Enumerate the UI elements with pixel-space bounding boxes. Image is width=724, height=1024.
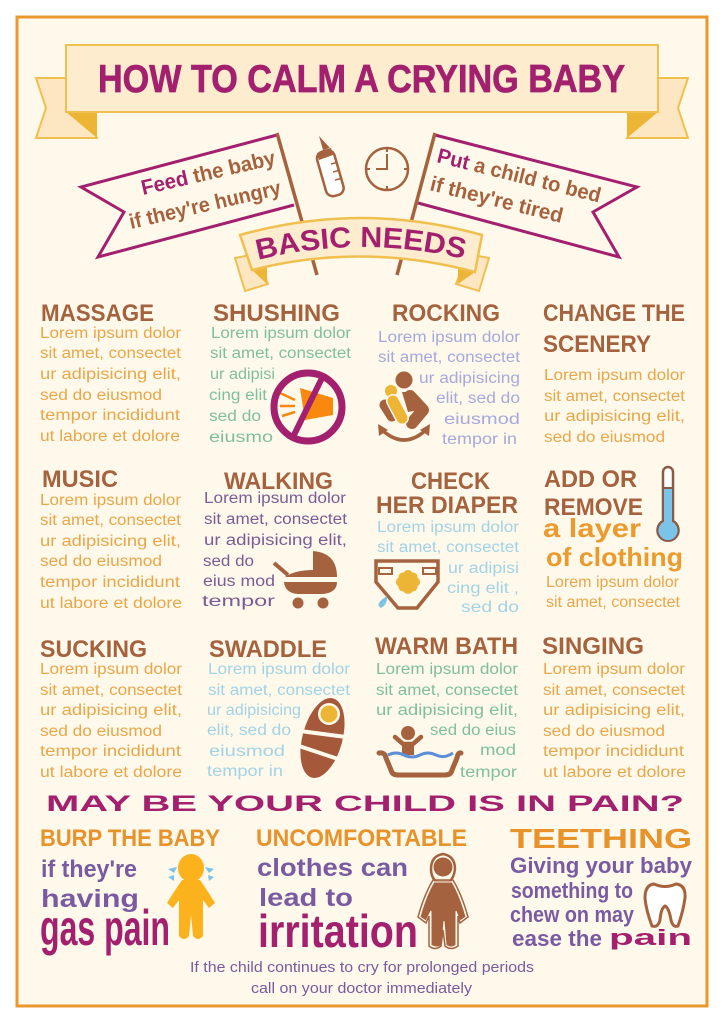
heading: SWADDLE xyxy=(209,636,327,663)
section heading: pain: MAY BE YOUR CHILD IS IN PAIN? xyxy=(46,791,684,816)
panel: rocking xyxy=(378,300,521,448)
heading: SCENERY xyxy=(543,331,651,358)
heading xyxy=(376,468,518,519)
title banner xyxy=(36,45,688,138)
text block: Lorem ipsum dolor xyxy=(204,490,346,507)
text block: sit amet, consectet xyxy=(378,349,521,366)
heading: MASSAGE xyxy=(41,300,154,327)
text block: Lorem ipsum dolor xyxy=(546,574,679,591)
text block: sit amet, consectet xyxy=(544,388,686,405)
text block: sit amet, consectet xyxy=(40,682,183,699)
text block: something to xyxy=(511,878,633,903)
icon: uncomfortable child xyxy=(418,854,468,948)
text block: lead to xyxy=(259,884,353,912)
text block xyxy=(40,325,182,445)
flag: put a child to bed xyxy=(397,133,637,275)
ribbon label: BASIC NEEDS xyxy=(256,227,466,260)
text block: cing elit , xyxy=(447,580,519,597)
icon: baby in bath xyxy=(379,726,461,775)
text block: sed do xyxy=(209,408,261,425)
text block: ur adipisicing xyxy=(207,702,301,719)
text block: tempor incididunt xyxy=(40,574,181,591)
text block: sed do xyxy=(461,599,519,616)
panel: swaddle xyxy=(207,636,352,783)
text block: Lorem ipsum dolor xyxy=(376,661,518,678)
heading: CHECK xyxy=(411,468,491,495)
text block xyxy=(257,854,418,957)
heading xyxy=(544,466,643,521)
icon: swaddled baby xyxy=(293,693,352,783)
heading: ROCKING xyxy=(392,300,500,327)
heading: MUSIC xyxy=(42,466,118,493)
panel: add or remove a layer of clothing xyxy=(543,466,683,611)
text block xyxy=(376,661,519,781)
text block xyxy=(40,661,183,781)
panel: music xyxy=(40,466,182,612)
text block: sed do eiusmod xyxy=(544,429,665,446)
text block: Lorem ipsum dolor xyxy=(544,367,685,384)
text block: Lorem ipsum dolor xyxy=(378,329,520,346)
text block: tempor in xyxy=(207,763,283,780)
text block: ur adipisicing elit, xyxy=(40,533,181,550)
flag: feed the baby: if they're hungry xyxy=(127,177,283,234)
text block: sit amet, consectet xyxy=(546,594,681,611)
panel: warm bath xyxy=(375,633,519,781)
panel: uncomfortable clothes xyxy=(256,825,468,957)
heading: SHUSHING xyxy=(213,300,340,327)
icon: clock xyxy=(366,148,408,190)
text block: Lorem ipsum dolor xyxy=(208,661,350,678)
text block: sit amet, consectet xyxy=(210,345,352,362)
text block: tempor incididunt xyxy=(40,407,181,424)
text block xyxy=(40,492,182,612)
flag: feed the baby xyxy=(81,133,317,275)
text block: Lorem ipsum dolor xyxy=(40,661,182,678)
text block: if they're xyxy=(41,856,137,883)
icon: thermometer xyxy=(658,467,679,541)
text block: sit amet, consectet xyxy=(377,539,520,556)
icon: rocking parent and baby xyxy=(378,372,430,440)
text block: ut labore et dolore xyxy=(40,764,182,781)
panel: shushing xyxy=(209,300,352,446)
text block xyxy=(546,574,681,611)
heading: SINGING xyxy=(542,633,644,660)
footer note xyxy=(190,960,534,997)
text block: ur adipisi xyxy=(210,366,275,383)
flag: feed the baby: Feed the baby xyxy=(139,147,278,200)
heading: BURP THE BABY xyxy=(40,825,220,852)
panel: massage xyxy=(40,300,182,445)
text block xyxy=(209,325,352,446)
heading: CHANGE THE xyxy=(543,300,685,327)
text block: ur adipisi xyxy=(448,560,519,577)
text block xyxy=(378,329,521,448)
text block: clothes can xyxy=(257,854,408,882)
icon: pram xyxy=(274,551,337,608)
text block: Lorem ipsum dolor xyxy=(377,519,519,536)
text block: sit amet, consectet xyxy=(376,682,519,699)
panel: walking xyxy=(202,468,348,610)
icon: no noise xyxy=(274,373,342,441)
icon: tooth xyxy=(645,884,685,926)
text block: Giving your baby xyxy=(510,853,693,878)
text block: ur adipisicing elit, xyxy=(40,702,182,719)
text block: sit amet, consectet xyxy=(208,682,351,699)
highlighted text: a layer xyxy=(543,513,641,543)
text block xyxy=(543,661,686,781)
text block: ur adipisicing elit, xyxy=(543,702,685,719)
heading: REMOVE xyxy=(544,494,643,521)
text block: ur adipisicing xyxy=(419,370,520,387)
text block: ur adipisicing elit, xyxy=(544,408,685,425)
text block: sed do eiusmod xyxy=(40,553,162,570)
text block: eiusmod xyxy=(444,411,520,428)
text block: sed do eiusmod xyxy=(543,723,665,740)
text block: having xyxy=(41,885,139,913)
heading: UNCOMFORTABLE xyxy=(256,825,467,852)
text block: sed do eiusmod xyxy=(40,723,162,740)
text block: ease the xyxy=(512,926,602,951)
title: HOW TO CALM A CRYING BABY xyxy=(98,58,625,101)
text block: elit, sed do xyxy=(436,390,520,407)
text block: elit, sed do xyxy=(207,722,291,739)
text block: ur adipisicing elit, xyxy=(204,532,347,549)
text block: irritation xyxy=(258,905,418,957)
text block xyxy=(544,367,686,446)
highlighted text xyxy=(543,513,683,572)
text block: eiusmod xyxy=(209,743,285,760)
text block: sit amet, consectet xyxy=(40,345,182,362)
text block: Lorem ipsum dolor xyxy=(211,325,351,342)
text block: Lorem ipsum dolor xyxy=(40,325,181,342)
icon: baby bottle xyxy=(315,136,345,198)
heading xyxy=(543,300,685,358)
flag: put a child to bed: Put a child to bed xyxy=(435,145,603,207)
text block: sit amet, consectet xyxy=(204,511,348,528)
panel: burp the baby xyxy=(40,825,220,956)
icon: crying baby xyxy=(167,854,215,939)
text block: sed do xyxy=(203,553,254,570)
text block xyxy=(40,856,170,956)
text block: ut labore et dolore xyxy=(543,764,686,781)
text block: mod xyxy=(480,742,516,759)
panel: singing xyxy=(542,633,686,781)
text block: eius mod xyxy=(203,573,275,590)
heading: SUCKING xyxy=(40,636,147,663)
text block xyxy=(207,661,351,780)
heading: WARM BATH xyxy=(375,633,518,660)
text block: tempor xyxy=(460,764,517,781)
text block: chew on may xyxy=(510,902,635,927)
text block xyxy=(377,519,520,616)
text block: tempor incididunt xyxy=(40,743,182,760)
text block: sed do eius xyxy=(430,722,516,739)
text block xyxy=(202,490,348,610)
basic needs ribbon xyxy=(234,216,490,292)
text block: sit amet, consectet xyxy=(40,512,182,529)
highlighted text: of clothing xyxy=(546,542,683,572)
heading: ADD OR xyxy=(544,466,637,493)
text block: sed do eiusmod xyxy=(40,387,162,404)
text block: eiusmo xyxy=(209,429,273,446)
text block: pain xyxy=(609,925,692,950)
text block: tempor xyxy=(202,593,275,610)
panel: check her diaper xyxy=(376,468,520,616)
text block: ut labore et dolore xyxy=(40,595,182,612)
panel: change the scenery xyxy=(543,300,686,446)
text block: tempor incididunt xyxy=(543,743,685,760)
icon: diaper xyxy=(376,561,438,608)
text block: sit amet, consectet xyxy=(543,682,686,699)
text block: tempor in xyxy=(442,431,517,448)
text block: Lorem ipsum dolor xyxy=(40,492,181,509)
text block: Lorem ipsum dolor xyxy=(543,661,685,678)
panel: sucking xyxy=(40,636,183,781)
text block: ur adipisicing elit, xyxy=(376,702,518,719)
text block: ut labore et dolore xyxy=(40,428,180,445)
heading: HER DIAPER xyxy=(376,492,518,519)
text block: cing elit xyxy=(209,387,268,404)
flag: put a child to bed: if they're tired xyxy=(428,173,565,228)
footer note: call on your doctor immediately xyxy=(251,981,473,997)
heading: WALKING xyxy=(224,468,333,495)
footer note: If the child continues to cry for prolonged periods xyxy=(190,960,534,976)
text block: ur adipisicing elit, xyxy=(40,366,181,383)
text block: gas pain xyxy=(40,900,170,956)
heading: TEETHING xyxy=(510,823,692,854)
text block xyxy=(510,853,693,951)
panel: teething xyxy=(510,823,693,951)
